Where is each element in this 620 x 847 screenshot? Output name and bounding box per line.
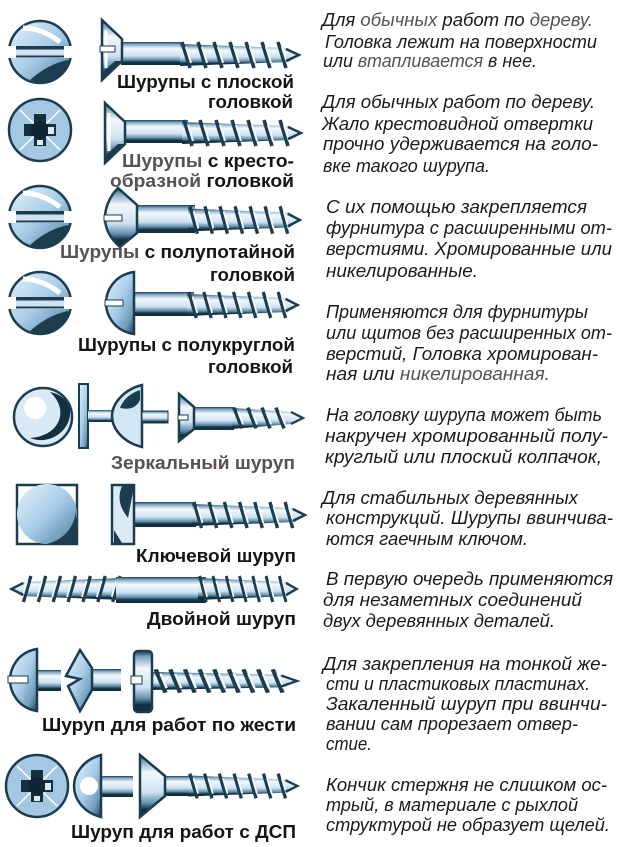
row: flat head screw: [6, 10, 597, 112]
description: flat head: или втапливается в нее.: [323, 51, 537, 71]
description: raised countersunk: верстиями. Хромированные или: [326, 239, 612, 259]
row: raised countersunk screw: [6, 186, 612, 285]
description: flat head: [320, 10, 597, 71]
description: chipboard screw: трый, в материале с рыхлой: [326, 795, 578, 815]
description: double screw: В первую очередь применяются: [326, 569, 613, 589]
icon: raised head with stub: [66, 650, 121, 711]
description: lag screw: ются гаечным ключом.: [326, 529, 528, 549]
description: raised countersunk: фурнитура с расширенными от-: [326, 218, 612, 238]
row: sheet metal screw: [8, 649, 607, 754]
description: chipboard screw: [326, 775, 610, 835]
label: cross head: образной головкой: [110, 171, 294, 191]
icon: flat head screw side view: [100, 20, 300, 80]
icon: washer plate with stud: [79, 384, 112, 448]
icon: double-ended screw: [10, 576, 298, 603]
description: flat head: Для обычных работ по дереву.: [320, 10, 593, 30]
label: double screw: Двойной шуруп: [147, 609, 296, 629]
description: cross head: прочно удерживается на голо-: [323, 134, 598, 154]
description: cross head: вке такого шурупа.: [323, 156, 490, 176]
icon: cross head screw side view: [105, 103, 302, 163]
description: cross head: [320, 92, 598, 176]
description: flat head: Головка лежит на поверхности: [325, 32, 597, 52]
description: mirror screw: На головку шурупа может быть: [326, 405, 602, 425]
label: cross head: Шурупы с кресто-: [122, 151, 294, 171]
label: flat head: головкой: [208, 92, 293, 112]
description: chipboard screw: структурой не образует щелей.: [326, 815, 610, 835]
label: chipboard screw: Шуруп для работ с ДСП: [71, 822, 296, 842]
description: sheet metal screw: [321, 654, 607, 754]
description: round head: [326, 302, 612, 384]
description: lag screw: [320, 488, 613, 549]
description: chipboard screw: Кончик стержня не слишком ос-: [326, 775, 607, 795]
icon: slotted head top view: [6, 21, 74, 83]
icon: cross head top view: [6, 755, 68, 817]
icon: pan head sheet metal screw: [131, 651, 298, 712]
icon: raised countersunk screw side view: [104, 188, 301, 247]
description: double screw: для незаметных соединений: [323, 590, 582, 610]
row: lag screw: [17, 484, 613, 566]
description: double screw: [323, 569, 613, 631]
label: round head: головкой: [208, 357, 293, 377]
row: chipboard screw: [6, 755, 610, 842]
description: lag screw: конструкций. Шурупы ввинчива-: [326, 508, 613, 528]
description: round head: ная или никелированная.: [326, 364, 550, 384]
label: raised countersunk: Шурупы с полупотайной: [60, 242, 295, 262]
description: round head: Применяются для фурнитуры: [326, 302, 588, 322]
description: sheet metal screw: Для закрепления на тонкой же-: [321, 654, 607, 674]
description: raised countersunk: С их помощью закрепляется: [326, 197, 587, 217]
description: lag screw: Для стабильных деревянных: [320, 488, 579, 508]
label: flat head: Шурупы с плоской: [117, 72, 294, 92]
icon: lag screw side view: [112, 485, 306, 544]
row: round head screw: [6, 272, 612, 384]
row: mirror screw: [14, 384, 608, 473]
description: round head: или щитов без расширенных от-: [326, 323, 612, 343]
icon: round head with stub: [8, 649, 61, 711]
description: raised countersunk: [326, 197, 612, 281]
icon: dome cap with thread: [112, 385, 168, 447]
description: raised countersunk: никелированные.: [326, 261, 478, 281]
label: lag screw: Ключевой шуруп: [136, 546, 296, 566]
description: sheet metal screw: вании сам прорезает отвер-: [326, 714, 578, 734]
label: mirror screw: Зеркальный шуруп: [111, 453, 295, 473]
label: raised countersunk: головкой: [210, 265, 295, 285]
description: sheet metal screw: стие.: [326, 734, 372, 754]
row: double screw: [10, 569, 613, 631]
icon: slotted head top view: [6, 186, 74, 248]
description: mirror screw: накручен хромированный полу-: [325, 426, 608, 446]
icon: mirror cap top view: [14, 388, 72, 446]
icon: chipboard screw side view: [140, 755, 298, 817]
description: cross head: Жало крестовидной отвертки: [321, 114, 593, 134]
description: mirror screw: круглый или плоский колпачок,: [325, 447, 602, 467]
icon: slotted head top view: [6, 272, 74, 334]
label: round head: [78, 335, 295, 377]
label: raised countersunk: [60, 242, 295, 285]
description: double screw: двух деревянных деталей.: [323, 611, 555, 631]
label: sheet metal screw: Шуруп для работ по жести: [42, 715, 296, 735]
description: sheet metal screw: сти и пластиковых пластинах.: [326, 674, 590, 694]
icon: round head screw side view: [105, 272, 299, 334]
icon: square head top view: [17, 484, 77, 544]
description: mirror screw: [325, 405, 608, 467]
label: round head: Шурупы с полукруглой: [78, 335, 295, 355]
icon: dome head with stub: [74, 755, 133, 817]
description: sheet metal screw: Закаленный шуруп при ввинчи-: [326, 694, 607, 714]
icon: cross head top view: [9, 99, 71, 161]
description: round head: верстий, Головка хромирован-: [326, 344, 598, 364]
label: flat head: [117, 72, 294, 112]
label: cross head: [110, 151, 294, 191]
row: cross head screw: [9, 92, 598, 191]
icon: mirror screw side view: [178, 394, 303, 441]
description: cross head: Для обычных работ по дереву.: [320, 92, 595, 112]
